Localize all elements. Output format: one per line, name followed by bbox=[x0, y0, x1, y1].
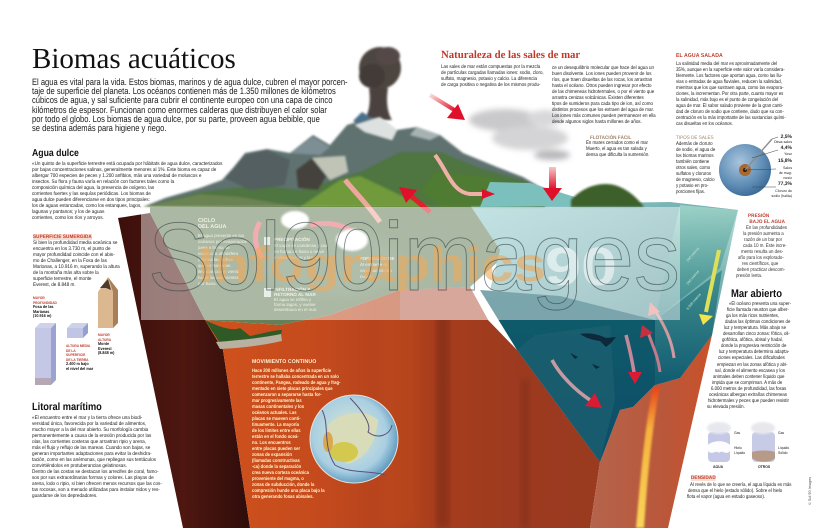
text: Tipos de sales: sulfatos y cloruros bbox=[676, 171, 711, 177]
text: Movimiento continuo: tinuamente. La mayoría bbox=[252, 422, 299, 428]
labels: other substances states: Sólido bbox=[778, 451, 788, 455]
text: Presión bajo el agua: afío para los explorado- bbox=[738, 255, 784, 261]
text: Litoral marítimo: «El encuentro entre el mar y la tierra ofrece una biodi- bbox=[32, 415, 142, 421]
ciclo del agua text bbox=[198, 218, 248, 286]
label: altura media: el nivel del mar bbox=[66, 366, 93, 370]
text: Agua dulce: los de aguas estancadas, como los estanques, lagos, bbox=[32, 203, 142, 209]
text: Mar abierto: su elevada presión. bbox=[707, 404, 745, 410]
ocean side face bbox=[655, 205, 738, 385]
sphere legend: 77,3% bbox=[778, 181, 792, 187]
text: Movimiento continuo: mar progresivamente las bbox=[252, 398, 302, 404]
arrow: wind to cloud bbox=[430, 95, 465, 120]
text: Presión bajo el agua: presión lenta. bbox=[736, 273, 762, 279]
text: Mar abierto: 6.000 metros de profundidad, las fosas bbox=[711, 386, 786, 392]
formacion de nubes note: nubes. bbox=[360, 274, 373, 279]
text: Mar abierto: luz y temperatura determina adapta- bbox=[719, 349, 789, 355]
soil layers at the left corner bbox=[205, 320, 282, 349]
text: El agua salada: vias o entradas de agua fluviales, reducen la salinidad, bbox=[676, 79, 782, 85]
sphere legend bbox=[771, 134, 792, 198]
text: Agua dulce: agua dulce pueden diferenciarse en dos tipos principales: bbox=[32, 197, 150, 203]
formacion de nubes note: vapor se forman bbox=[360, 268, 392, 273]
text: Litoral marítimo bbox=[32, 415, 162, 499]
text: Movimiento continuo: comenzaron a separarse hasta for- bbox=[252, 392, 322, 398]
text: sales de mar, column 2: desde algunos siglos hasta millones de años. bbox=[552, 118, 642, 124]
text: Tipos de sales: y potasio en pro- bbox=[676, 183, 708, 189]
text: sales de mar, column 1: sulfato, magnesio, potasio y calcio. La diferencia bbox=[441, 76, 537, 82]
text: Movimiento continuo bbox=[252, 368, 340, 500]
text: sales de mar, column 2: arrastra cenizas volcánicas. Existen diferentes bbox=[552, 94, 644, 100]
label: Agua: AGUA bbox=[713, 465, 723, 469]
text: El agua salada: blemente. Los factores que aportan agua, como las llu- bbox=[676, 73, 782, 79]
text: Superficie sumergida: encuentra en los 3.730 m, el punto de bbox=[33, 246, 111, 252]
label: Fosa de las Marianas: MAYOR bbox=[33, 296, 45, 300]
column: Marianas depth bbox=[35, 323, 56, 385]
arrow: rising hydrothermal current bbox=[640, 325, 660, 372]
lava rising through the ridge bbox=[636, 386, 660, 528]
text: El agua salada: centración es la más importante de las sustancias quími- bbox=[676, 115, 786, 121]
arrow: rain into the sea bbox=[543, 167, 562, 201]
heading: Presión bajo el agua bbox=[748, 212, 785, 225]
text: Tipos de sales bbox=[676, 141, 716, 195]
heading: Tipos de sales: TIPOS DE SALES bbox=[676, 135, 714, 141]
sphere legend: Otras sales bbox=[774, 140, 792, 144]
text: Densidad: densa que el hielo (estado sólido). Sobre el hielo bbox=[688, 488, 782, 494]
text: Litoral marítimo: versidad única, favorecida por la variedad de alimentos, bbox=[32, 421, 146, 427]
label: altura media bbox=[66, 344, 94, 370]
sphere legend: Yeso bbox=[784, 152, 792, 156]
ciclo del agua text: que se trasladan bbox=[198, 263, 231, 268]
ocean surface bbox=[470, 202, 738, 320]
text: Agua dulce: corrientes fuertes y las sequías periódicas. Los biomas de bbox=[32, 191, 151, 197]
text: Mar abierto: ciones especiales. Las dificultades bbox=[718, 355, 785, 361]
text: El agua salada: La salinidad media del mar es aproximadamente del bbox=[676, 61, 777, 67]
heading: El agua salada: EL AGUA SALADA bbox=[676, 53, 723, 59]
ocean depth labels: 200 metros bbox=[686, 246, 700, 263]
text: Litoral marítimo: más el flujo y reflujo de las mareas. Cuando son bajas, se bbox=[32, 445, 150, 451]
text: El agua salada: cas disueltas en los océanos. bbox=[676, 121, 733, 127]
text: Movimiento continuo: océanos actuales. Las bbox=[252, 410, 297, 416]
label: Fosa de las Marianas: PROFUNDIDAD bbox=[33, 300, 57, 304]
text: Mar abierto: impida que se compriman. A más de bbox=[712, 380, 782, 386]
text: Litoral marítimo: guardarse de los depredadores. bbox=[32, 493, 97, 499]
label: Fosa de las Marianas: (10.916 m) bbox=[33, 313, 51, 318]
text: Litoral marítimo: mucho mayor a la del mar abierto. Su morfología cambia bbox=[32, 427, 148, 433]
text: Movimiento continuo: masas continentales y los bbox=[252, 404, 304, 410]
intro text: kilómetros de espesor. Funcionan como enormes calderas que distribuyen el calor solar bbox=[32, 105, 327, 115]
text: Tipos de sales: de magnesio, calcio bbox=[676, 177, 715, 183]
text: Litoral marítimo: convirtiéndolos en protuberancias gelatinosas. bbox=[32, 463, 127, 469]
text: Movimiento continuo: continente, Pangea, rodeado de agua y frag- bbox=[252, 380, 340, 386]
text: Mar abierto: empiezan en las zonas afótica y abi- bbox=[717, 362, 787, 368]
arrow: river down the slope bbox=[435, 155, 495, 199]
label: Monte Everest: ALTURA bbox=[98, 338, 111, 342]
infiltracion y retorno al mar step bbox=[264, 286, 317, 312]
text: Superficie sumergida: superficie terrestre, el monte bbox=[33, 276, 92, 282]
label: altura media: SUPERFICIE bbox=[66, 353, 85, 357]
text: Mar abierto: gofótica, afótica, abisal y hadal, bbox=[722, 337, 783, 343]
heading: Presión bajo el agua: PRESIÓN bbox=[748, 213, 769, 219]
ocean depth labels: 200 metros bbox=[686, 269, 700, 286]
formacion de nubes note: FORMACIÓN DE bbox=[360, 256, 394, 261]
text: Agua dulce: por bajas concentraciones salinas, generalmente menores al 1%. Este bioma es capaz de bbox=[32, 167, 216, 173]
sphere legend: de mag- bbox=[779, 171, 792, 175]
text: Movimiento continuo: proveniente del magma, o bbox=[252, 476, 304, 482]
text: Mar abierto: ga los más ricos nutrientes, bbox=[726, 313, 779, 319]
text: sales de mar, column 2: distintos procesos que los extraen del agua de mar. bbox=[552, 106, 654, 112]
block: right salmon rock face bbox=[590, 335, 712, 528]
volcano plume bbox=[359, 47, 401, 120]
text: Superficie sumergida bbox=[33, 240, 120, 288]
text: Densidad: flota el vapor (agua en estado gaseoso). bbox=[687, 494, 765, 500]
heading: Naturaleza de las sales de mar: Naturaleza de las sales de mar bbox=[441, 49, 580, 61]
text: Tipos de sales: los biomas marinos bbox=[676, 153, 714, 159]
text: Litoral marítimo: arena, lodo o ripio, si bien ofrecen menos recursos que las cos- bbox=[32, 481, 162, 487]
watermark: orange infographics: Infographics bbox=[198, 239, 546, 292]
infiltracion y retorno al mar step: forma lagos, y vuelve bbox=[274, 302, 316, 307]
label: Fosa de las Marianas bbox=[33, 296, 57, 318]
text: sales de mar, column 1 bbox=[441, 64, 544, 88]
label: Otros: OTROS bbox=[758, 465, 770, 469]
icon: sphere of sea salts bbox=[719, 137, 778, 196]
globe: tectonic plates bbox=[310, 395, 398, 483]
text: Mar abierto: ficie llamada neuston que alber- bbox=[727, 307, 789, 313]
text: Movimiento continuo: entre placas pueden ser bbox=[252, 446, 300, 452]
label: Fosa de las Marianas: Fosa de las bbox=[33, 304, 54, 309]
text: Litoral marítimo: tación, como en las anémonas, que repliegan sus tentáculos bbox=[32, 457, 156, 463]
text: El agua salada: agua de mar. El sabor salado proviene de la gran canti- bbox=[676, 103, 783, 109]
text: Movimiento continuo: crea nueva corteza oceánica bbox=[252, 470, 309, 476]
text: Flotación fácil: Muerto, el agua es tan salada y bbox=[586, 146, 647, 152]
arrow: evaporation from land bbox=[399, 187, 430, 212]
infiltracion y retorno al mar step: El agua se infiltra y bbox=[274, 297, 312, 302]
intro text bbox=[32, 77, 348, 133]
intro text: El agua es vital para la vida. Estos biomas, marinos y de agua dulce, cubren el mayor porcen- bbox=[32, 77, 348, 87]
ocean depth labels bbox=[686, 246, 702, 311]
text: sales de mar, column 2: tipos de sumideros para cada tipo de ion, así como bbox=[552, 100, 653, 106]
labels: other substances states: Líquido bbox=[778, 446, 789, 450]
text: Litoral marítimo: olas, las corrientes costeras que arrastran ripio y arena, bbox=[32, 439, 146, 445]
heading: Presión bajo el agua: BAJO EL AGUA bbox=[749, 219, 785, 225]
text: sales de mar, column 1: Las sales de mar están compuestas por la mezcla bbox=[441, 64, 540, 70]
text: Presión bajo el agua: res científicos, que bbox=[742, 261, 778, 267]
icon: other substances cylinder bbox=[751, 422, 775, 462]
intro text: cúbicos de agua, y sal suficiente para cubrir el continente europeo con una capa de cinco bbox=[32, 95, 332, 105]
label: Monte Everest: (8.848 m) bbox=[98, 350, 114, 355]
text: sales de mar, column 2: de las chimeneas hidrotermales, o por el viento que bbox=[552, 88, 654, 94]
text: Tipos de sales: otros sales, como bbox=[676, 165, 710, 171]
text: El agua salada: ciones, la incrementan. Por otra parte, cuanto mayor es bbox=[676, 91, 783, 97]
ocean seafloor volume bbox=[480, 270, 722, 462]
label: Monte Everest: Monte bbox=[98, 341, 109, 346]
labels: water states: Gas bbox=[734, 431, 740, 435]
text: Presión bajo el agua: deben practicar descom- bbox=[737, 267, 785, 273]
icon: water states cylinder bbox=[707, 422, 731, 462]
label: altura media: DE LA bbox=[66, 348, 76, 352]
labels: water states: Líquido bbox=[734, 451, 745, 455]
label: Monte Everest: MAYOR bbox=[98, 333, 110, 337]
label: Monte Everest bbox=[98, 333, 114, 355]
watermark: white 90 logo: 90 bbox=[545, 237, 617, 297]
column: Everest height bbox=[98, 277, 118, 328]
text: Mar abierto bbox=[707, 301, 791, 410]
text: Movimiento continuo: están en el fondo oceá- bbox=[252, 434, 299, 440]
text: Agua dulce: albergar 700 especies de peces y 1.200 anfibios, más una variedad de moluscos e bbox=[32, 173, 201, 179]
text: Mar abierto: animales deben contener líquido que bbox=[713, 374, 784, 380]
text: Agua dulce: «Un quinto de la superficie terrestre está ocupada por hábitats de agua dulce, caracterizados bbox=[32, 161, 222, 167]
island bbox=[571, 184, 644, 207]
text: Mar abierto: «El océano presenta una super- bbox=[729, 301, 791, 307]
text: Superficie sumergida: mo de Challenger, en la Fosa de las bbox=[33, 258, 107, 264]
text: sales de mar, column 2: ríos, que traen disueltas de las rocas, los arrastran bbox=[552, 76, 652, 82]
arrow: ocean current left bbox=[552, 360, 602, 408]
ciclo del agua text: océanos por evaporación bbox=[198, 239, 248, 244]
text: Flotación fácil: densa que dificulta la sumersión. bbox=[586, 152, 649, 158]
ciclo del agua text: por lluvia. bbox=[198, 281, 217, 286]
ciclo del agua text: CICLO bbox=[198, 218, 216, 224]
text: Agua dulce: insectos. Su flora y fauna varía en relación con factores tales como la bbox=[32, 179, 174, 185]
ciclo del agua text: llevadas por el viento bbox=[198, 269, 240, 274]
text: Superficie sumergida: Marianas, a 10.916 m, superando la altura bbox=[33, 264, 120, 270]
deep water shelf bbox=[517, 325, 615, 462]
arrow: rising current right bbox=[648, 302, 674, 358]
text: Flotación fácil bbox=[586, 140, 650, 158]
labels: water states: Hielo bbox=[734, 446, 742, 450]
sea strip between mountains bbox=[480, 182, 640, 207]
label: altura media: 2.400 m bajo bbox=[66, 361, 89, 366]
text: sales de mar, column 2: buen disolvente. Los iones pueden provenir de los bbox=[552, 70, 651, 76]
text: Movimiento continuo: zonas de subducción, donde la bbox=[252, 482, 314, 488]
text: Tipos de sales: de sodio, el agua de bbox=[676, 147, 715, 153]
ciclo del agua text: y forma las nubes bbox=[198, 257, 233, 262]
cloud bbox=[469, 109, 570, 160]
arrow: yellow light ray bbox=[699, 250, 719, 325]
text: Mar abierto: oceánicas albergan extrañas chimeneas bbox=[709, 392, 787, 398]
text: Movimiento continuo: placas se mueven conti- bbox=[252, 416, 301, 422]
precipitacion step: y alimenta ríos y lagos. bbox=[274, 255, 319, 260]
text: Movimiento continuo: otra generando fosas abisales. bbox=[252, 494, 314, 500]
sphere legend: sodio (halita) bbox=[771, 194, 792, 198]
text: Mar abierto: luz y temperatura. Más abajo se bbox=[724, 325, 786, 331]
text: El agua salada: la salinidad, más bajo es el punto de congelación del bbox=[676, 97, 778, 103]
text: Agua dulce: lagunas y pantanos; y los de aguas bbox=[32, 209, 104, 215]
text: Litoral marítimo: tas rocosas, son a menudo utilizadas para instalar nidos y res- bbox=[32, 487, 160, 493]
text: Superficie sumergida: mayor profundidad coincide con el abis- bbox=[33, 252, 115, 258]
text: sales de mar, column 2 bbox=[552, 64, 656, 124]
text: Presión bajo el agua: razón de un bar por bbox=[744, 237, 782, 243]
fish silhouettes bbox=[570, 333, 616, 369]
text: Litoral marítimo: generan importantes adaptaciones para evitar la deshidra- bbox=[32, 451, 152, 457]
translucent watermark band bbox=[141, 207, 680, 320]
label: altura media: ALTURA MEDIA bbox=[66, 344, 90, 348]
ciclo del agua text: DEL AGUA bbox=[198, 224, 226, 230]
text: Flotación fácil: En mares cerrados como el mar bbox=[586, 140, 648, 146]
text: Mar abierto: dadas las óptimas condiciones de bbox=[725, 319, 790, 325]
arrow: ocean current centre bbox=[626, 335, 642, 384]
heading: Litoral marítimo: Litoral marítimo bbox=[32, 401, 102, 413]
mountain range bbox=[143, 112, 545, 207]
labels: other substances states: Gas bbox=[778, 431, 784, 435]
watermark: outlined Sol90images: Sol90images bbox=[148, 202, 680, 311]
heading: Movimiento continuo: MOVIMIENTO CONTINUO bbox=[252, 359, 316, 365]
credit: © Sol 90 Images bbox=[808, 477, 812, 505]
text: Litoral marítimo: permanentemente a causa de la erosión producida por las bbox=[32, 433, 151, 439]
label: Fosa de las Marianas: Marianas bbox=[33, 308, 49, 314]
text: Mar abierto: hidrotermales y peces que pueden resistir bbox=[708, 398, 789, 404]
text: Movimiento continuo: (llamadas constructivas bbox=[252, 458, 300, 464]
text: Presión bajo el agua: mento resulta un des- bbox=[741, 249, 783, 255]
text: El agua salada: 35%, aunque en la superficie este valor varía considera- bbox=[676, 67, 785, 73]
text: Superficie sumergida: Everest, de 8.848 m. bbox=[33, 282, 76, 288]
column: mean surface height bbox=[67, 323, 88, 338]
text: Mar abierto: desarrollan cinco zonas: fótica, oli- bbox=[723, 331, 790, 337]
infiltracion y retorno al mar step: INFILTRACIÓN Y bbox=[274, 286, 310, 292]
text: Movimiento continuo: no. Los encuentros bbox=[252, 440, 291, 446]
ciclo del agua text: hacia los continentes bbox=[198, 275, 240, 280]
intro text: taje de superficie del planeta. Los océanos contienen más de 1.350 millones de kilómetros bbox=[32, 86, 336, 96]
text: Movimiento continuo: -ca) donde la separación bbox=[252, 464, 301, 470]
ciclo del agua text: pasa a forma de bbox=[198, 245, 230, 250]
text: Superficie sumergida: de la montaña más alta sobre la bbox=[33, 270, 99, 276]
sphere legend: 2,5% bbox=[781, 134, 792, 140]
text: Litoral marítimo: Dentro de las costas se destacan los arrecifes de coral, famo- bbox=[32, 469, 159, 475]
sphere legend: Sales bbox=[783, 166, 792, 170]
land surface under the band bbox=[150, 205, 500, 325]
text: Mar abierto: sal, donde el alimento escasea y los bbox=[715, 368, 785, 374]
sphere legend: Cloruro de bbox=[775, 189, 792, 193]
block: front orange rock face bbox=[205, 287, 600, 528]
text: El agua salada: mientras que los que sustraen agua, como las evapora- bbox=[676, 85, 784, 91]
heading: Agua dulce: Agua dulce bbox=[32, 148, 79, 159]
precipitacion step: en forma de lluvia o nieve bbox=[274, 249, 325, 254]
text: Tipos de sales: porciones fijas. bbox=[676, 189, 705, 195]
text: Movimiento continuo: de los límites entre ellas bbox=[252, 428, 301, 434]
text: sales de mar, column 1: de carga positiva o negativa de los mismos produ- bbox=[441, 82, 540, 88]
text: Movimiento continuo: Hace 200 millones de años la superficie bbox=[252, 368, 331, 374]
text: Agua dulce: composición química del agua, la presencia de oxígeno, las bbox=[32, 185, 154, 191]
text: Movimiento continuo: mentado en siete placas principales que bbox=[252, 386, 333, 392]
heading: Mar abierto: Mar abierto bbox=[731, 288, 782, 300]
sphere legend: nesio bbox=[783, 176, 792, 180]
text: El agua salada: dad de cloruro de sodio que contiene, dado que su con- bbox=[676, 109, 784, 115]
text: sales de mar, column 2: hasta el océano. Otros pueden ingresar por efecto bbox=[552, 82, 651, 88]
precipitacion step: El vapor se condensa y cae bbox=[274, 243, 328, 248]
arrow: infiltration ribbon bbox=[345, 180, 380, 222]
precipitacion step: PRECIPITACIÓN bbox=[274, 236, 310, 242]
text: Movimiento continuo: zonas de expansión bbox=[252, 452, 292, 458]
ciclo del agua text: vapor a la atmósfera bbox=[198, 251, 239, 256]
sphere legend: 15,8% bbox=[778, 158, 792, 164]
text: Agua dulce: corrientes, como los ríos y arroyos. bbox=[32, 215, 104, 221]
text: Densidad bbox=[687, 482, 792, 500]
label: Monte Everest: Everest bbox=[98, 346, 112, 350]
text: Litoral marítimo: sos por sus extraordinarias formas y colores. Las playas de bbox=[32, 475, 154, 481]
text: El agua salada bbox=[676, 61, 786, 127]
ciclo del agua text: El agua presente en los bbox=[198, 233, 245, 238]
heading: Superficie sumergida: SUPERFICIE SUMERGIDA bbox=[33, 234, 92, 240]
infiltracion y retorno al mar step: desemboca en el mar. bbox=[274, 307, 317, 312]
text: sales de mar, column 2: Los iones más comunes pueden permanecer en ella bbox=[552, 112, 656, 118]
labels: other substances states bbox=[778, 431, 789, 455]
text: Presión bajo el agua: En las profundidades bbox=[746, 225, 787, 231]
text: sales de mar, column 1: de partículas cargadas llamadas iones: sodio, cloro, bbox=[441, 70, 544, 76]
formacion de nubes note: Al enfriarse el bbox=[360, 262, 387, 267]
text: Agua dulce bbox=[32, 161, 222, 221]
text: Tipos de sales: también contiene bbox=[676, 159, 709, 165]
text: Presión bajo el agua: cada 10 m. Este incre- bbox=[743, 243, 787, 249]
text: Presión bajo el agua bbox=[736, 225, 787, 279]
heading: Flotación fácil: FLOTACIÓN FÁCIL bbox=[590, 134, 631, 140]
text: Densidad: Al revés de lo que se creería, el agua líquida es más bbox=[690, 482, 791, 488]
text: Mar abierto: donde la progresiva restricción de bbox=[721, 343, 786, 349]
text: Presión bajo el agua: la presión aumenta a bbox=[743, 231, 784, 237]
ocean depth labels: 6.000 metros bbox=[686, 292, 702, 311]
labels: water states bbox=[734, 431, 745, 455]
pink stream on the land bbox=[256, 222, 365, 258]
text: Superficie sumergida: Si bien la profundidad media oceánica se bbox=[33, 240, 117, 246]
heading: Densidad: DENSIDAD bbox=[691, 475, 716, 481]
text: Tipos de sales: Además de cloruro bbox=[676, 141, 713, 147]
label: altura media: DE LA TIERRA bbox=[66, 358, 89, 362]
intro text: se destina además para higiene y riego. bbox=[32, 123, 166, 133]
precipitacion step bbox=[264, 236, 328, 260]
text: Movimiento continuo: compresión hunde una placa bajo la bbox=[252, 488, 325, 494]
title: Biomas acuáticos bbox=[32, 43, 236, 75]
intro text: por todo el globo. Los biomas de agua dulce, por su parte, proveen agua bebible, que bbox=[32, 114, 320, 124]
sphere legend: 4,4% bbox=[781, 145, 792, 151]
block: left dark face bbox=[118, 213, 250, 528]
text: sales de mar, column 2: ce un desequilibrio molecular que hace del agua un bbox=[552, 64, 654, 70]
text: Movimiento continuo: terrestre se hallaba concentrada en un solo bbox=[252, 374, 339, 380]
infiltracion y retorno al mar step: RETORNO AL MAR bbox=[274, 292, 316, 297]
formacion de nubes note bbox=[360, 256, 394, 279]
cloud in the water cycle panel bbox=[281, 211, 368, 251]
